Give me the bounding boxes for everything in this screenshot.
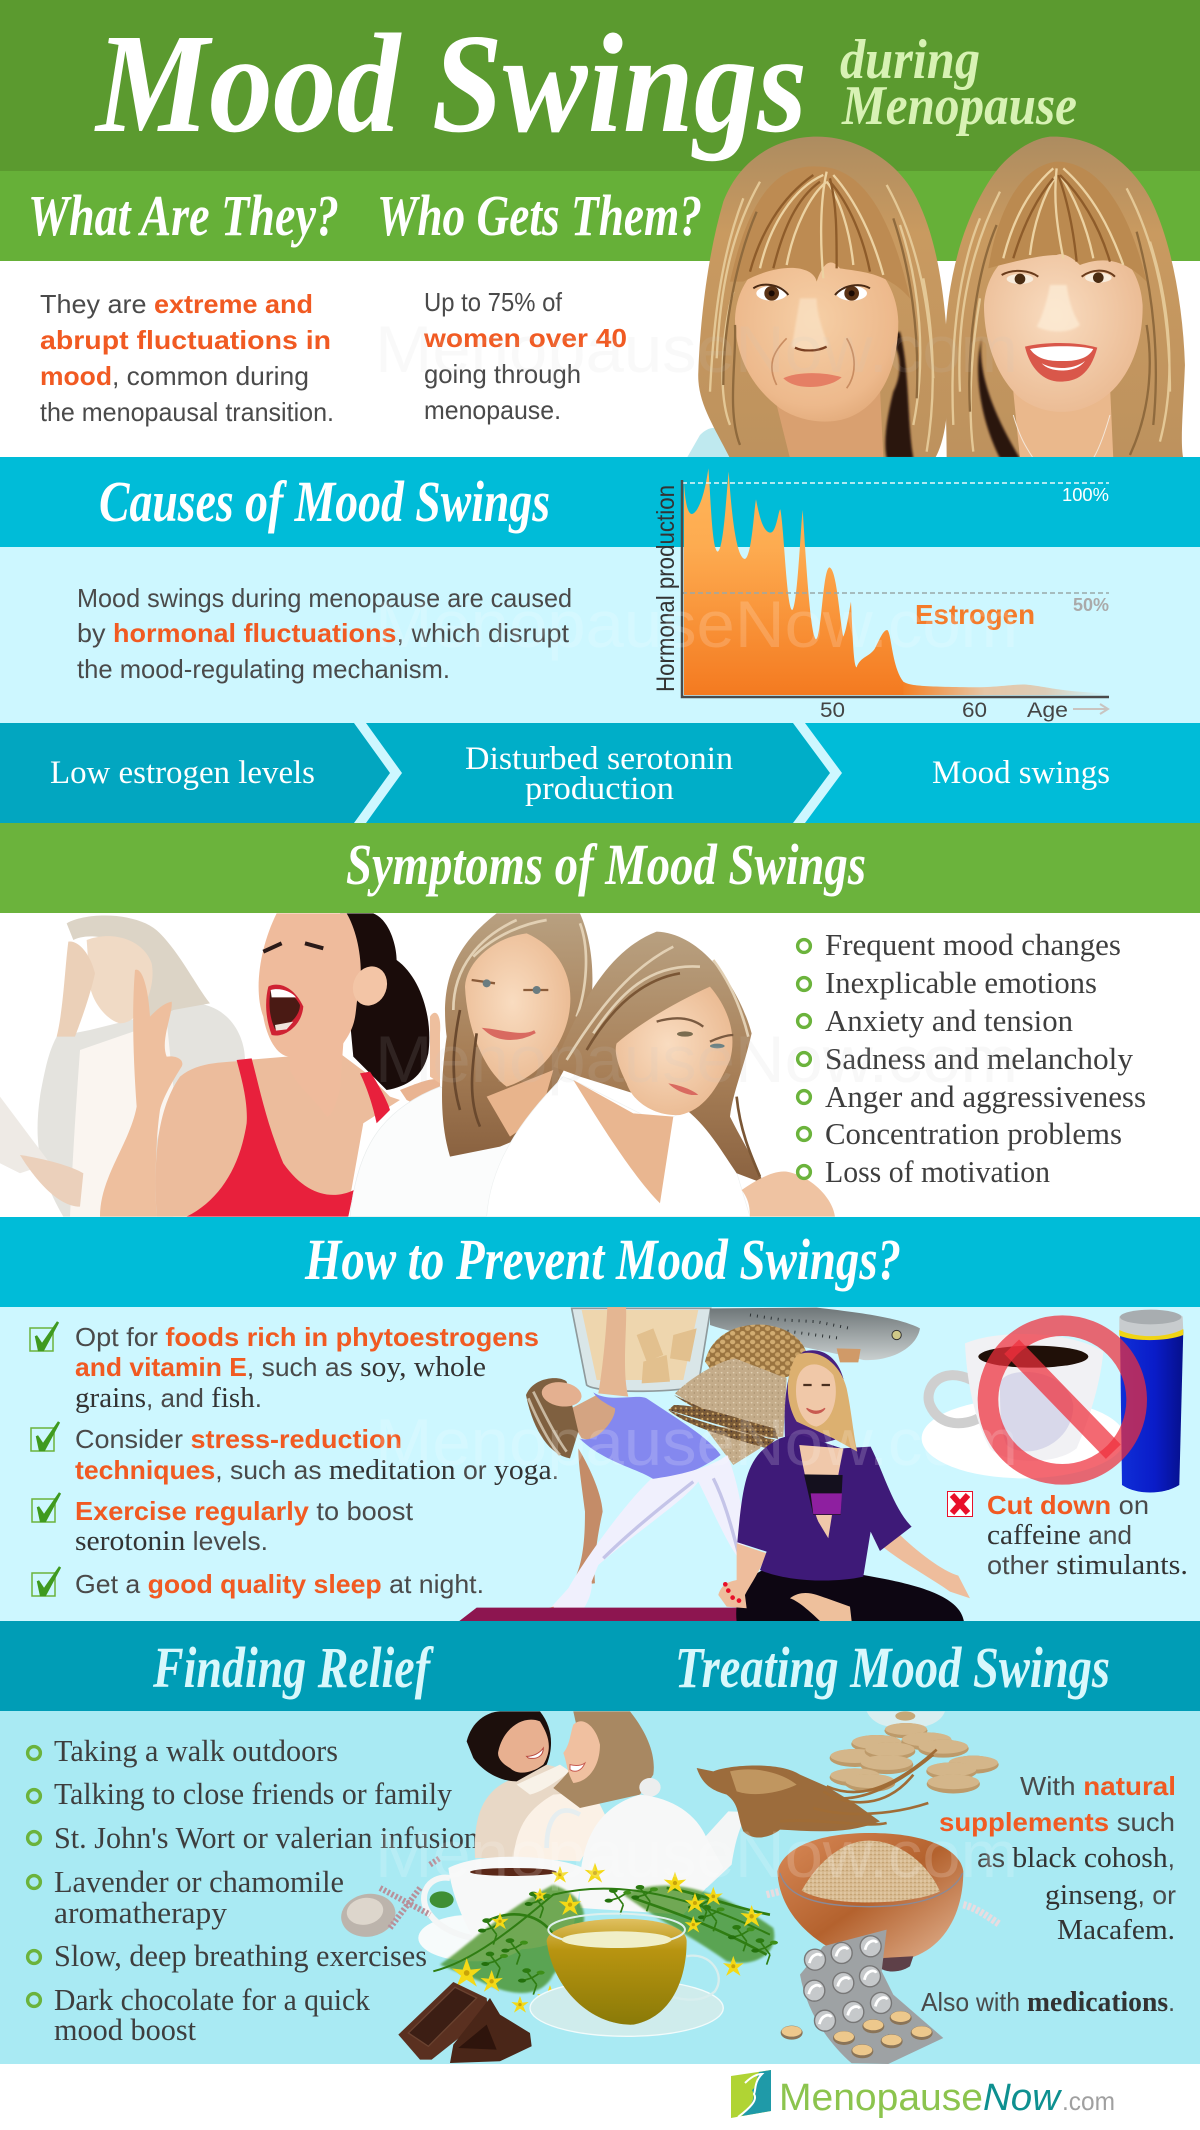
- list: relief tips: St. John's Wort or valerian infusion: [54, 1820, 479, 1855]
- text block: stress reduction: Consider stress-reduction: [75, 1424, 402, 1454]
- text block: cut down on caffeine: other stimulants.: [987, 1549, 1188, 1581]
- list: symptoms: Concentration problems: [825, 1116, 1122, 1151]
- heading: Causes of Mood Swings: Causes of Mood Swings: [99, 469, 550, 534]
- smiling woman: [945, 137, 1185, 458]
- list: relief tips: Taking a walk outdoors: [54, 1733, 338, 1768]
- smiling woman in white: [350, 913, 592, 1217]
- process flow: low estrogen to mood swings: [0, 723, 1200, 823]
- chart: estrogen hormonal production by age: 50%: [1073, 595, 1109, 615]
- list: relief tips: Dark chocolate for a quick: [54, 1982, 370, 2017]
- text block: natural supplements: [921, 1771, 1176, 2018]
- loose pill: [781, 2026, 803, 2040]
- list: symptoms: Inexplicable emotions: [825, 965, 1097, 1000]
- text block: who gets them: going through: [424, 359, 581, 389]
- text block: what are mood swings: abrupt fluctuations in: [40, 325, 331, 355]
- wooden bowl with powder: [777, 1833, 963, 1972]
- icon: check marks: [30, 1322, 60, 1596]
- process flow: low estrogen to mood swings: Mood swings: [932, 755, 1110, 791]
- two women laughing: [467, 1711, 654, 1861]
- heading: How to Prevent Mood Swings?: How to Prevent Mood Swings?: [304, 1227, 901, 1292]
- list: relief tips: Talking to close friends or family: [54, 1776, 452, 1811]
- photo: phytoestrogen foods, yoga and meditation: [459, 1307, 1183, 1622]
- text block: stress reduction: techniques, such as meditation or yoga.: [75, 1454, 559, 1486]
- list: relief tips: mood boost: [54, 2012, 196, 2047]
- text block: exercise: Exercise regularly to boost: [75, 1496, 414, 1526]
- heading: What Are They?: What Are They?: [28, 183, 339, 248]
- list: symptoms: Anxiety and tension: [825, 1003, 1073, 1038]
- chart: estrogen hormonal production by age: 60: [962, 699, 987, 722]
- yoga woman: [525, 1307, 746, 1618]
- prohibition sign: [988, 1326, 1137, 1474]
- tea cup white: [418, 1857, 583, 1961]
- list: symptoms: Frequent mood changes: [825, 927, 1121, 962]
- soybeans: [705, 1325, 808, 1378]
- chart: estrogen hormonal production by age: [652, 468, 1109, 722]
- arrow: chevron two: [793, 723, 842, 823]
- chart: estrogen hormonal production by age: Estrogen: [915, 599, 1035, 630]
- photo: herbal supplements and medication: [697, 1711, 1000, 2064]
- faded stressed woman: [0, 916, 245, 1217]
- list: symptoms: Sadness and melancholy: [825, 1041, 1134, 1076]
- list: symptoms: [798, 927, 1146, 1189]
- heading: Who Gets Them?: Who Gets Them?: [377, 183, 702, 248]
- list: relief tips: Slow, deep breathing exercises: [54, 1938, 427, 1973]
- text block: natural supplements: ginseng, or: [1045, 1879, 1176, 1911]
- list: relief tips: Lavender or chamomile: [54, 1864, 344, 1899]
- herb sprigs with yellow flowers: [433, 1863, 778, 2013]
- process flow: low estrogen to mood swings: Disturbed serotonin: [465, 741, 733, 777]
- list: symptoms: Loss of motivation: [825, 1154, 1050, 1189]
- text block: exercise: serotonin levels.: [75, 1525, 268, 1557]
- photo: two women faces, frowning and smiling: [687, 137, 1185, 458]
- watermarks: MenopauseNow.com: [375, 1022, 1018, 1096]
- herb sprig: [767, 1891, 1000, 1925]
- blister pack: [800, 1930, 943, 2064]
- text block: foods rich in phytoestrogens: [75, 1322, 539, 1414]
- text block: causes description: by hormonal fluctuations , which disrupt: [77, 618, 570, 648]
- screaming woman: [100, 913, 429, 1217]
- process flow: low estrogen to mood swings: production: [525, 771, 674, 807]
- watermarks: MenopauseNow.com: [375, 312, 1018, 386]
- logo: MenopauseNow.com: Menopause: [779, 2077, 983, 2119]
- text block: what are mood swings: mood, common during: [40, 361, 309, 391]
- chocolate pieces: [398, 1982, 532, 2063]
- text block: natural supplements: Macafem.: [1057, 1914, 1175, 1946]
- tofu in glass: [572, 1308, 711, 1391]
- glass cup of herbal tea: [530, 1914, 723, 2036]
- process flow: low estrogen to mood swings: Low estrogen levels: [50, 755, 315, 791]
- photo: two friends, tea and herbs: [338, 1711, 778, 2063]
- supplement tablets and bottle: [830, 1711, 999, 1793]
- list: relief tips: [28, 1733, 479, 2047]
- watermarks: MenopauseNow.com: [375, 1817, 1018, 1891]
- text block: natural supplements: With natural: [1020, 1771, 1176, 1801]
- text block: natural supplements: supplements such: [939, 1807, 1175, 1837]
- logo: MenopauseNow.com: Now: [983, 2077, 1063, 2119]
- text block: who gets them: women over 40: [423, 323, 627, 353]
- photo: four women showing mood changes: [0, 913, 835, 1217]
- chart: estrogen hormonal production by age: 50: [820, 699, 845, 722]
- logo: MenopauseNow.com: [731, 2070, 1115, 2119]
- watermarks: MenopauseNow.com: [375, 1405, 1018, 1479]
- list: relief tips: aromatherapy: [54, 1895, 227, 1930]
- title: Mood Swings during Menopause: Menopause: [841, 75, 1077, 137]
- text block: natural supplements: as black cohosh,: [977, 1842, 1175, 1874]
- heading: Finding Relief: Finding Relief: [152, 1635, 434, 1700]
- text block: who gets them: [423, 287, 627, 425]
- watermarks: [375, 312, 1018, 1891]
- title: Mood Swings during Menopause: during: [840, 29, 980, 91]
- bread: [668, 1358, 787, 1465]
- text block: foods rich in phytoestrogens: Opt for foods rich in phytoestrogens: [75, 1322, 539, 1352]
- meditating woman: [718, 1350, 970, 1622]
- text block: what are mood swings: [40, 289, 334, 427]
- text block: cut down on caffeine: Cut down on: [987, 1490, 1149, 1520]
- fish: [710, 1308, 920, 1362]
- chart: estrogen hormonal production by age: 100%: [1062, 485, 1109, 505]
- tea infuser and thyme: [338, 1858, 454, 1941]
- frowning woman: [698, 137, 949, 458]
- chart: estrogen hormonal production by age: Age: [1027, 699, 1068, 722]
- teapot: [547, 1778, 748, 1915]
- icon: red cross box: [948, 1492, 972, 1516]
- heading: Symptoms of Mood Swings: Symptoms of Mood Swings: [346, 832, 866, 897]
- coffee cup: [922, 1334, 1125, 1478]
- looking down woman in white: [487, 932, 835, 1217]
- text block: who gets them: menopause.: [424, 395, 561, 425]
- text block: cut down on caffeine: [987, 1490, 1188, 1581]
- logo: MenopauseNow.com: .com: [1062, 2086, 1115, 2116]
- chart: estrogen hormonal production by age: Hormonal production: [652, 485, 680, 692]
- watermarks: MenopauseNow.com: [375, 587, 1018, 661]
- text block: foods rich in phytoestrogens: and vitamin E, such as soy, whole: [75, 1351, 486, 1383]
- text block: cut down on caffeine: caffeine and: [987, 1519, 1132, 1551]
- yoga mat: [459, 1608, 740, 1621]
- text block: foods rich in phytoestrogens: grains, and fish.: [75, 1382, 262, 1414]
- ginseng root: [697, 1750, 937, 1837]
- text block: natural supplements: Also with medications.: [921, 1986, 1175, 2018]
- text block: stress reduction: [75, 1424, 559, 1486]
- text block: who gets them: Up to 75% of: [424, 287, 563, 317]
- text block: causes description: Mood swings during menopause are caused: [77, 583, 572, 613]
- title: Mood Swings during Menopause: Mood Swings: [94, 4, 807, 162]
- text block: sleep: Get a good quality sleep at night.: [75, 1569, 484, 1599]
- text block: what are mood swings: the menopausal transition.: [40, 397, 334, 427]
- text block: causes description: [77, 583, 572, 684]
- text block: causes description: the mood-regulating mechanism.: [77, 654, 450, 684]
- list: symptoms: Anger and aggressiveness: [825, 1079, 1146, 1114]
- text block: exercise: [75, 1496, 414, 1557]
- arrow: chevron one: [354, 723, 402, 823]
- energy drink can: [1119, 1310, 1183, 1492]
- text block: what are mood swings: They are extreme and: [40, 289, 313, 319]
